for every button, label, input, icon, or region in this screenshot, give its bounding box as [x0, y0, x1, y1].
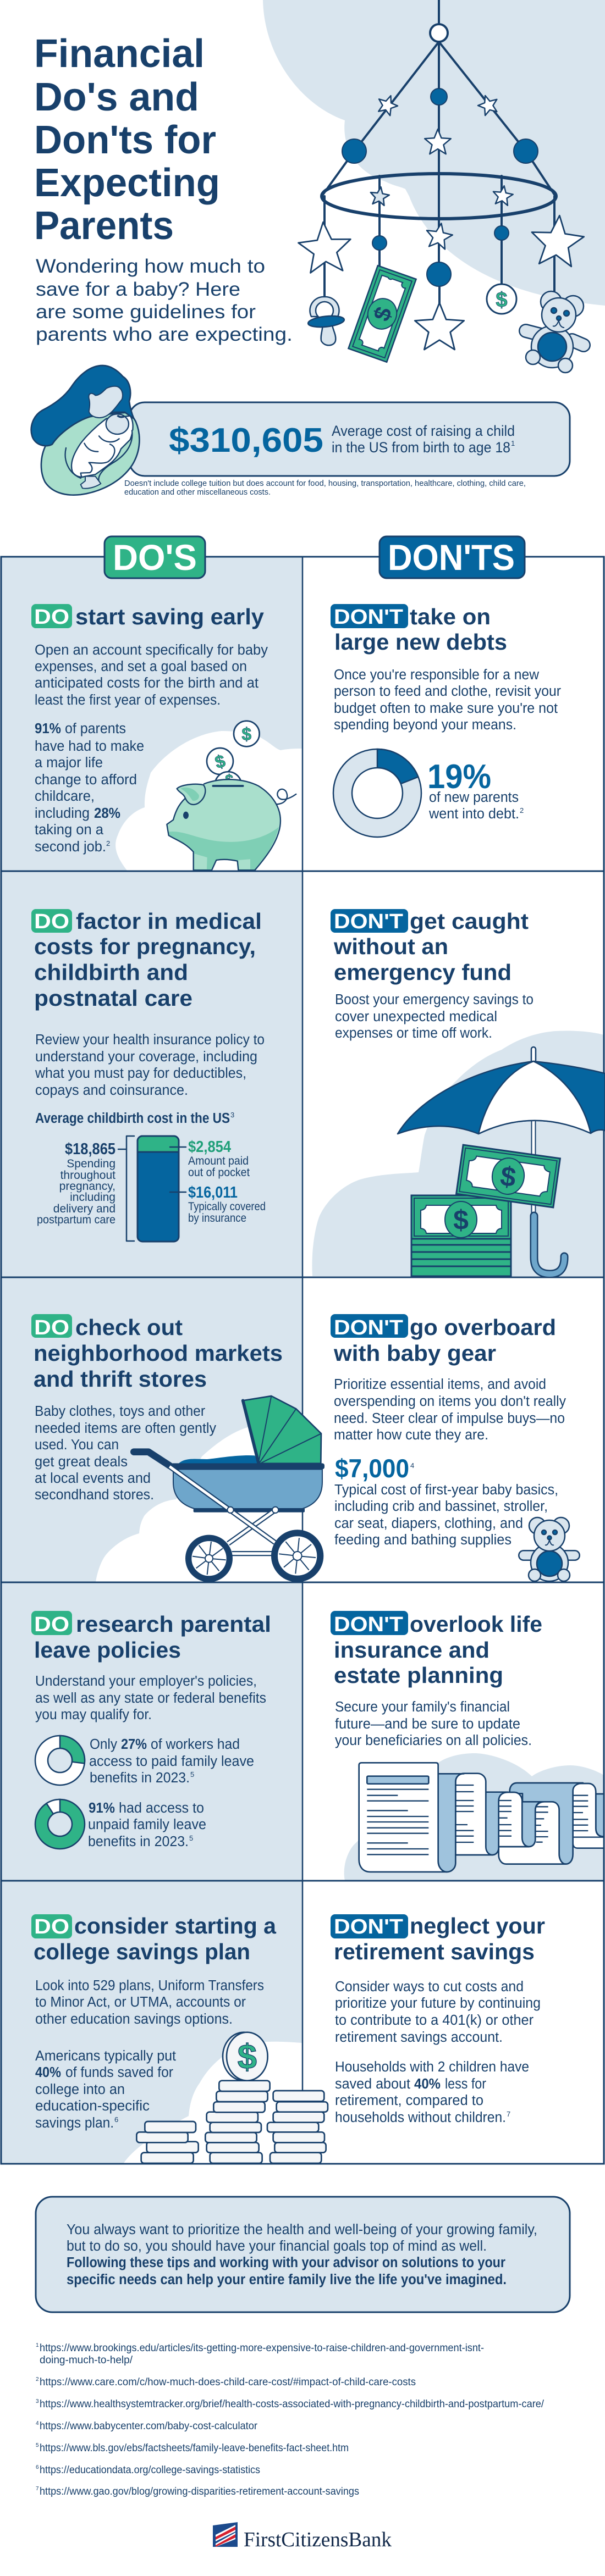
body text: future—and be sure to update [335, 1716, 520, 1732]
badge: DO'S: DO'S [113, 537, 197, 578]
source footnotes: https://www.babycenter.com/baby-cost-calculator [40, 2420, 258, 2432]
label: total spending: pregnancy, [59, 1180, 116, 1193]
heading: and thrift stores [34, 1366, 207, 1392]
source footnotes: 7 [36, 2486, 39, 2492]
icon: pacifier [307, 297, 345, 345]
title: Do's and [34, 75, 199, 119]
panel: do factor in medical costs [31, 908, 266, 1242]
statistic text [35, 2048, 176, 2131]
stat footnote: education and other miscellaneous costs. [124, 487, 271, 497]
statistic text: households without children. [335, 2110, 506, 2125]
body text: retirement savings account. [335, 2030, 503, 2045]
heading: estate planning [334, 1663, 503, 1688]
body text: spending beyond your means. [334, 717, 516, 733]
cloud: stroller backdrop [96, 1427, 302, 1582]
body text: Review your health insurance policy to [35, 1032, 265, 1048]
label: out of pocket: out of pocket [188, 1166, 250, 1179]
panel: don't get caught without an emergency fund [331, 908, 605, 1276]
statistic text: taking on a [35, 822, 104, 838]
heading: DO [34, 606, 69, 629]
stacked bar chart: childbirth cost [37, 1136, 266, 1242]
stat: $7,000: feeding and bathing supplies [334, 1532, 512, 1548]
stat description: in the US from birth to age 18 [332, 439, 510, 456]
heading [331, 1314, 556, 1366]
label: total spending: postpartum care [37, 1214, 116, 1226]
title: Don'ts for [34, 118, 216, 162]
source footnotes: 6 [36, 2464, 39, 2470]
body text [335, 992, 534, 1041]
body text: need. Steer clear of impulse buys—no [334, 1411, 565, 1426]
stat: paid family leave: benefits in 2023. [90, 1770, 190, 1786]
cloud: umbrella backdrop [312, 1031, 604, 1276]
title: Expecting [34, 161, 220, 205]
stat: paid family leave: access to paid family leave [89, 1754, 254, 1769]
heading: without an [333, 934, 448, 959]
heading: research parental [76, 1611, 271, 1637]
stat value: $310,605 [169, 422, 323, 459]
icon: document scrolls [359, 1763, 604, 1872]
left column background [1, 557, 302, 2164]
callout: closing message: but to do so, you should have your financial goals top of mind as well. [67, 2239, 487, 2254]
stat description: Average cost of raising a child [332, 423, 515, 439]
body text [335, 1979, 541, 2045]
heading: DON'T [334, 1316, 403, 1339]
heading: get caught [410, 908, 529, 934]
statistic text [335, 2059, 529, 2125]
cloud: coins backdrop [124, 2042, 302, 2163]
statistic text: including [35, 806, 90, 821]
source footnotes: https://www.bls.gov/ebs/factsheets/family-leave-benefits-fact-sheet.htm [40, 2442, 349, 2454]
source footnotes: 4 [36, 2420, 39, 2427]
heading: check out [75, 1315, 183, 1340]
heading: emergency fund [334, 960, 512, 985]
statistic text: saved about [335, 2076, 410, 2092]
stat: unpaid family leave: 91% [89, 1801, 115, 1816]
heading: consider starting a [74, 1913, 277, 1938]
heading [331, 604, 507, 655]
icon: piggy bank [167, 721, 296, 870]
label: covered by insurance: by insurance [188, 1212, 246, 1225]
panel: do check out neighborhood markets [31, 1314, 324, 1579]
panel: average cost stat [129, 402, 570, 476]
panel: don't neglect your retirement savings [331, 1913, 545, 2125]
heading: retirement savings [334, 1939, 535, 1964]
body text [334, 667, 561, 733]
source footnotes: doing-much-to-help/ [40, 2355, 133, 2366]
body text: copays and coinsurance. [35, 1083, 188, 1098]
heading: leave policies [34, 1637, 181, 1663]
statistic text: savings plan. [35, 2115, 114, 2131]
label: covered by insurance [188, 1184, 266, 1225]
heading: start saving early [75, 604, 264, 629]
heading [331, 908, 529, 985]
body text: Prioritize essential items, and avoid [334, 1377, 546, 1392]
statistic text: a major life [35, 755, 103, 771]
icon: coin stacks [136, 2032, 328, 2163]
stat: paid family leave: 27% [121, 1737, 147, 1752]
panel: do consider a college savings plan [31, 1913, 328, 2163]
body text [35, 1674, 266, 1722]
body text: matter how cute they are. [334, 1427, 488, 1443]
body text: needed items are often gently [35, 1421, 216, 1436]
statistic text: 91% [35, 721, 61, 736]
statistic text: have had to make [35, 739, 144, 754]
body text: person to feed and clothe, revisit your [334, 684, 561, 699]
heading: large new debts [334, 629, 507, 655]
stat: unpaid family leave: 5 [189, 1834, 193, 1842]
label: total spending: delivery and [53, 1203, 116, 1215]
statistic text: 40% [414, 2076, 441, 2092]
label: total spending: including [70, 1191, 116, 1204]
icon: dollar bill [348, 265, 416, 362]
stat: 19%: 19% [427, 758, 491, 796]
callout: closing message [36, 2197, 570, 2312]
stat: 19%: went into debt. [428, 806, 519, 822]
intro text: parents who are expecting. [36, 324, 293, 345]
label: total spending [37, 1140, 116, 1226]
heading: DO [34, 1613, 69, 1636]
statistic text: college into an [35, 2082, 125, 2097]
icon: mother holding baby [31, 365, 139, 495]
statistic text: 6 [114, 2115, 118, 2124]
panel: do start saving early [31, 604, 296, 870]
stat: $7,000: car seat, diapers, clothing, and [334, 1516, 523, 1531]
icon: piggy bank: $ [241, 724, 251, 744]
statistic text: Households with 2 children have [335, 2059, 529, 2075]
source footnotes: 1 [36, 2342, 39, 2348]
statistic text: childcare, [35, 789, 95, 804]
body text: Secure your family's financial [335, 1699, 510, 1715]
callout: closing message: Following these tips and working with your advisor on solutions to your [67, 2255, 505, 2270]
title: Parents [34, 204, 174, 248]
body text: understand your coverage, including [35, 1049, 257, 1065]
label: total spending: throughout [61, 1169, 116, 1182]
stat: paid family leave: 5 [190, 1770, 194, 1779]
intro text: Wondering how much to [36, 256, 265, 277]
source footnotes: https://www.care.com/c/how-much-does-child-care-cost/#impact-of-child-care-costs [40, 2376, 416, 2388]
icon: teddy bear [526, 291, 584, 373]
heading: go overboard [410, 1315, 556, 1340]
body text: Look into 529 plans, Uniform Transfers [35, 1978, 264, 1993]
heading: college savings plan [34, 1939, 250, 1964]
body text: cover unexpected medical [335, 1009, 497, 1024]
body text [35, 1032, 265, 1098]
heading: DON'T [334, 606, 403, 629]
statistic text: retirement, compared to [335, 2093, 483, 2108]
body text [334, 1377, 566, 1443]
stat footnote: Doesn't include college tuition but does account for food, housing, transportation, healthcare, clothing, child care, [124, 479, 526, 488]
stat: $7,000 [334, 1454, 558, 1548]
hero background blob [263, 0, 605, 306]
cloud: documents backdrop [344, 1753, 604, 1881]
heading: with baby gear [333, 1340, 496, 1366]
icon: stacked cash [411, 1195, 511, 1276]
body text: as well as any state or federal benefits [35, 1691, 266, 1706]
icon: tilted bill [457, 1145, 560, 1207]
callout: closing message: You always want to prioritize the health and well-being of your growing family, [67, 2222, 537, 2237]
icon: coin [487, 284, 516, 314]
label: total spending: $18,865 [65, 1140, 116, 1158]
stat: unpaid family leave [88, 1801, 206, 1849]
stat description [332, 423, 515, 456]
icon: baby stroller [134, 1396, 324, 1579]
heading: DO [34, 910, 69, 933]
heading: DO [34, 1316, 69, 1339]
stat: $7,000: 4 [410, 1461, 414, 1470]
body text: Once you're responsible for a new [334, 667, 540, 683]
body text: least the first year of expenses. [35, 693, 221, 708]
statistic text: second job. [35, 839, 106, 855]
body text: get great deals [35, 1454, 128, 1470]
body text: expenses, and set a goal based on [35, 659, 247, 674]
heading: insurance and [334, 1637, 490, 1663]
statistic text: 7 [507, 2110, 510, 2118]
body text: Understand your employer's policies, [35, 1674, 257, 1689]
stat: $7,000: Typical cost of first-year baby basics, [334, 1482, 558, 1498]
body text [35, 1404, 216, 1503]
icon: umbrella over money [398, 1047, 605, 1276]
body text: to Minor Act, or UTMA, accounts or [35, 1995, 246, 2010]
body text: Baby clothes, toys and other [35, 1404, 205, 1419]
stat: paid family leave: of workers had [151, 1737, 240, 1752]
icon: piggy bank: $ [213, 751, 228, 772]
callout: closing message: specific needs can help your entire family live the life you've imagined. [67, 2272, 507, 2287]
heading: factor in medical [76, 908, 262, 934]
body text: used. You can [35, 1437, 119, 1453]
body text: prioritize your future by continuing [335, 1996, 541, 2011]
heading [31, 1611, 271, 1663]
body text [35, 1978, 264, 2027]
label: out of pocket [188, 1138, 250, 1179]
stat: unpaid family leave: had access to [119, 1801, 204, 1816]
body text: Boost your emergency savings to [335, 992, 534, 1007]
source footnotes: 2 [36, 2376, 39, 2383]
body text: anticipated costs for the birth and at [35, 675, 258, 691]
donut chart: 91% [35, 1799, 85, 1849]
comparison grid lines [1, 557, 604, 2164]
heading [331, 1611, 542, 1688]
source footnotes: 5 [36, 2442, 39, 2448]
stat: 19% [427, 758, 524, 822]
statistic text: of funds saved for [65, 2065, 173, 2080]
source footnotes: https://www.brookings.edu/articles/its-getting-more-expensive-to-raise-children-and-government-isnt- [40, 2342, 484, 2354]
panel: don't take on large new debts [331, 604, 561, 837]
icon: coin: $ [496, 289, 508, 312]
title [34, 32, 220, 248]
donut chart: 27% [35, 1736, 85, 1785]
body text: what you must pay for deductibles, [35, 1066, 246, 1081]
icon: teddy bear [524, 1517, 575, 1581]
heading: take on [410, 604, 491, 629]
label: out of pocket: $2,854 [188, 1138, 231, 1156]
label: out of pocket: Amount paid [188, 1155, 249, 1167]
icon: coin stacks: $ [238, 2038, 257, 2076]
body text: to contribute to a 401(k) or other [335, 2013, 534, 2028]
body text: overspending on items you don't really [334, 1394, 566, 1409]
icon: stacked cash: $ [453, 1205, 469, 1236]
logo: First Citizens Bank [213, 2522, 392, 2551]
panel: don't overlook life insurance [331, 1611, 604, 1872]
source footnotes: https://educationdata.org/college-savings-statistics [40, 2464, 260, 2476]
cloud: piggy bank backdrop [116, 731, 302, 871]
body text: Open an account specifically for baby [35, 642, 268, 658]
stat footnote [124, 479, 526, 497]
heading [331, 1913, 545, 1964]
stat: 19%: 2 [520, 806, 524, 815]
body text [335, 1699, 532, 1748]
heading: DO [34, 1915, 69, 1938]
heading: childbirth and [34, 960, 188, 985]
heading: postnatal care [34, 985, 193, 1011]
icon: tilted bill: $ [498, 1160, 518, 1193]
stat: unpaid family leave: benefits in 2023. [88, 1834, 189, 1849]
heading: neglect your [410, 1913, 545, 1938]
label: covered by insurance: $16,011 [188, 1184, 238, 1201]
body text: you may qualify for. [35, 1707, 152, 1722]
icon: dollar bill: $ [368, 303, 397, 324]
statistic text: education-specific [35, 2098, 150, 2114]
title: Financial [34, 32, 205, 76]
body text: Consider ways to cut costs and [335, 1979, 524, 1995]
heading [31, 908, 262, 1011]
statistic text: 40% [35, 2065, 61, 2080]
stat: paid family leave: Only [90, 1737, 117, 1752]
panel: do research parental leave policies [31, 1611, 271, 1849]
icon: baby mobile [297, 0, 586, 373]
heading: neighborhood markets [34, 1340, 283, 1366]
stat: $7,000: including crib and bassinet, stroller, [334, 1499, 548, 1514]
body text: at local events and [35, 1471, 151, 1486]
stat: unpaid family leave: unpaid family leave [88, 1817, 206, 1832]
heading [31, 1314, 283, 1392]
statistic text: of parents [65, 721, 126, 736]
body text: secondhand stores. [35, 1487, 154, 1503]
body text [35, 642, 268, 708]
source footnotes: https://www.gao.gov/blog/growing-disparities-retirement-account-savings [40, 2486, 359, 2497]
source footnotes: 3 [36, 2398, 39, 2405]
stat: paid family leave [89, 1737, 254, 1786]
intro text: save for a baby? Here [36, 279, 240, 300]
stat: 19%: of new parents [429, 790, 519, 805]
statistic text: 28% [94, 806, 120, 821]
body text: other education savings options. [35, 2012, 233, 2027]
source footnotes: https://www.healthsystemtracker.org/brief/health-costs-associated-with-pregnancy-childbirth-and-postpartum-care/ [40, 2398, 544, 2410]
heading: DON'T [334, 1915, 403, 1938]
source footnotes [36, 2342, 544, 2497]
body text: your beneficiaries on all policies. [335, 1733, 532, 1748]
statistic text: Americans typically put [35, 2048, 176, 2064]
heading: DON'T [334, 1613, 403, 1636]
badge: DON'TS: DON'TS [388, 537, 515, 578]
chart title: 3 [230, 1111, 234, 1119]
label: covered by insurance: Typically covered [188, 1200, 266, 1213]
statistic text: less for [445, 2076, 486, 2092]
icon: piggy bank: $ [225, 772, 233, 788]
stat description: 1 [511, 439, 515, 447]
body text: expenses or time off work. [335, 1026, 492, 1041]
statistic text: change to afford [35, 772, 137, 788]
body text: budget often to make sure you're not [334, 701, 558, 716]
label: total spending: Spending [67, 1157, 116, 1170]
intro text [36, 256, 293, 345]
heading: overlook life [410, 1611, 542, 1637]
heading [31, 1913, 277, 1964]
chart title: Average childbirth cost in the US [35, 1111, 230, 1126]
panel: don't go overboard with baby gear [331, 1314, 575, 1581]
stat: $7,000: $7,000 [335, 1454, 409, 1483]
donut chart: 19% [333, 749, 421, 837]
heading: costs for pregnancy, [34, 934, 256, 959]
heading: DON'T [334, 910, 403, 933]
statistic text [35, 721, 144, 855]
statistic text: 2 [106, 839, 110, 847]
intro text: are some guidelines for [36, 301, 256, 323]
logo: First Citizens Bank: FirstCitizensBank [244, 2528, 392, 2551]
